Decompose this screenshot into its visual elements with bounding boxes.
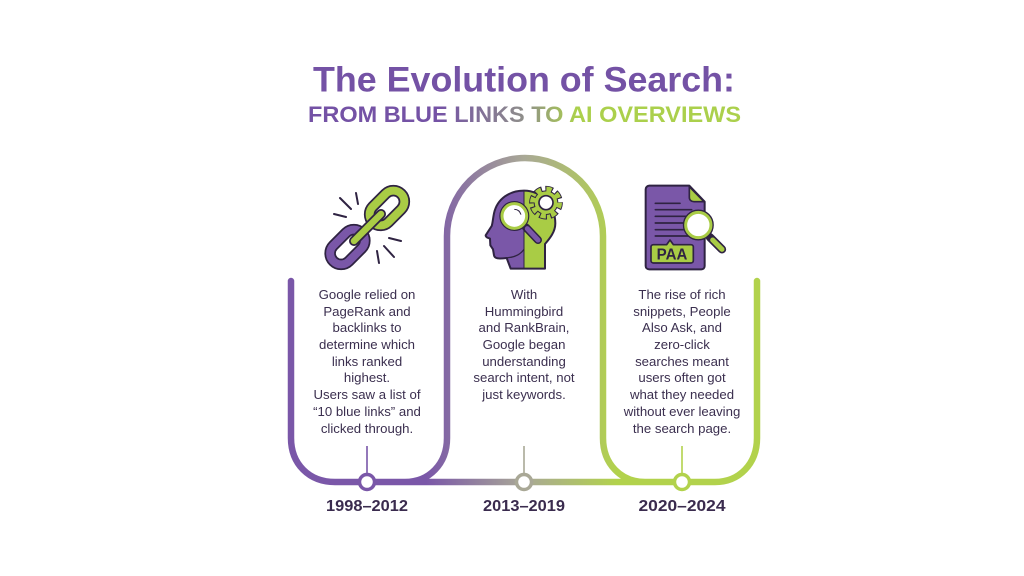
marker: 2013-2019 bbox=[516, 446, 532, 490]
text: 1998-2012 description: determine which bbox=[319, 337, 415, 352]
text: 1998-2012 description: backlinks to bbox=[333, 320, 401, 335]
text: 2013-2019 description: and RankBrain, bbox=[479, 320, 569, 335]
text: 1998-2012 description: “10 blue links” and bbox=[313, 404, 421, 419]
marker: 1998-2012 bbox=[360, 446, 374, 490]
text: 2020-2024 description: what they needed bbox=[629, 387, 734, 402]
text: 1998-2012 description bbox=[313, 287, 421, 436]
year label: 1998-2012: 1998–2012 bbox=[326, 498, 408, 515]
text: 1998-2012 description: highest. bbox=[344, 370, 390, 385]
subtitle: FROM BLUE LINKS TO AI OVERVIEWS bbox=[308, 102, 741, 127]
icon: PAA document with magnifier: PAA bbox=[657, 247, 687, 264]
icon: PAA document with magnifier bbox=[646, 186, 722, 269]
text: 2020-2024 description: the search page. bbox=[633, 421, 731, 436]
text: 2020-2024 description: Also Ask, and bbox=[642, 320, 722, 335]
icon: head with magnifier and gear bbox=[486, 190, 559, 269]
text: 2020-2024 description: without ever leaving bbox=[623, 404, 740, 419]
text: 2013-2019 description: search intent, not bbox=[473, 370, 575, 385]
text: 1998-2012 description: Users saw a list of bbox=[314, 387, 421, 402]
text: 1998-2012 description: clicked through. bbox=[321, 421, 413, 436]
text: 2013-2019 description: Google began bbox=[483, 337, 565, 352]
title: The Evolution of Search: bbox=[313, 60, 735, 100]
text: 2013-2019 description bbox=[473, 287, 575, 402]
icon: chain link bbox=[326, 186, 409, 269]
text: 2020-2024 description: searches meant bbox=[635, 354, 729, 369]
text: 1998-2012 description: links ranked bbox=[332, 354, 402, 369]
text: 2020-2024 description bbox=[623, 287, 740, 436]
text: 2020-2024 description: zero-click bbox=[654, 337, 710, 352]
year label: 2013-2019: 2013–2019 bbox=[483, 498, 565, 515]
text: 2013-2019 description: understanding bbox=[482, 354, 566, 369]
text: 2020-2024 description: users often got bbox=[638, 370, 726, 385]
marker: 2020-2024 bbox=[674, 446, 690, 490]
text: 2020-2024 description: snippets, People bbox=[633, 304, 731, 319]
timeline track bbox=[291, 158, 757, 482]
text: 2013-2019 description: With bbox=[511, 287, 537, 302]
text: 2020-2024 description: The rise of rich bbox=[638, 287, 726, 302]
text: 2013-2019 description: Hummingbird bbox=[485, 304, 563, 319]
text: 2013-2019 description: just keywords. bbox=[481, 387, 566, 402]
text: 1998-2012 description: PageRank and bbox=[323, 304, 411, 319]
year label: 2020-2024: 2020–2024 bbox=[638, 498, 726, 515]
text: 1998-2012 description: Google relied on bbox=[319, 287, 415, 302]
